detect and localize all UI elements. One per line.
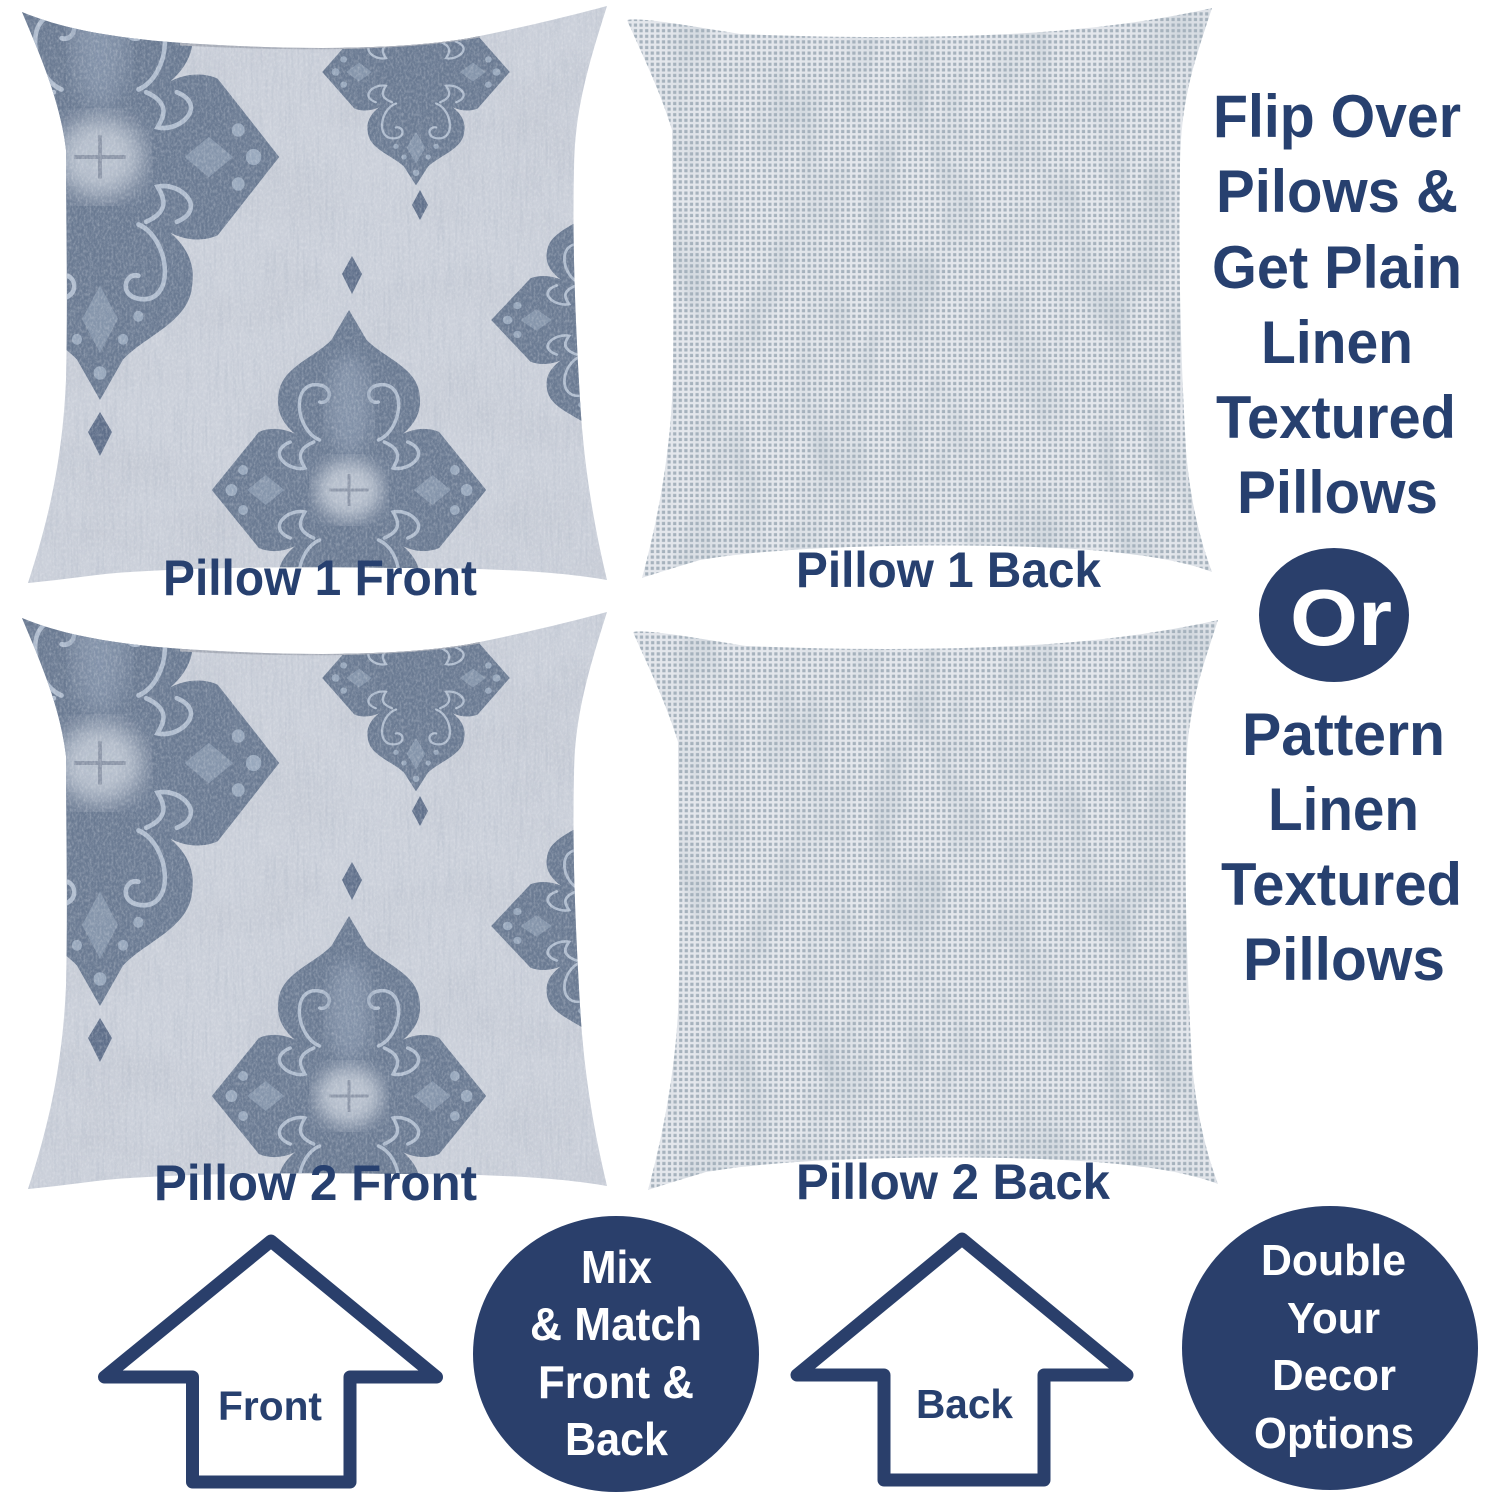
badge: mix and match: & Match [530, 1298, 702, 1350]
badge: or [1259, 548, 1409, 682]
pillow 1 back [620, 0, 1220, 590]
badge: double your decor options: Options [1254, 1409, 1414, 1458]
text block: pattern: Pattern [1242, 701, 1445, 768]
label: pillow 2 front: Pillow 2 Front [154, 1155, 477, 1211]
pillow 1 front [0, 0, 721, 670]
arrow: front [104, 1241, 436, 1482]
arrow: front: Front [218, 1383, 322, 1429]
arrow: back: Back [916, 1381, 1013, 1427]
text block: pattern: Linen [1268, 776, 1419, 843]
label: pillow 1 back: Pillow 1 Back [796, 542, 1101, 598]
badge: double your decor options: Your [1287, 1294, 1380, 1343]
pillow 2 back [626, 612, 1226, 1202]
badge: double your decor options: Double [1261, 1236, 1406, 1285]
text block: flip over: Linen [1261, 309, 1413, 376]
badge: or: Or [1290, 573, 1392, 662]
text block: pattern: Pillows [1243, 926, 1445, 993]
text block: flip over: Pillows [1237, 459, 1438, 526]
text block: pattern [1221, 701, 1462, 993]
text block: pattern: Textured [1221, 851, 1462, 918]
badge: mix and match [473, 1216, 759, 1492]
arrow: back [797, 1239, 1127, 1480]
badge: double your decor options [1182, 1206, 1478, 1490]
badge: mix and match: Back [565, 1413, 668, 1465]
text block: flip over [1212, 83, 1462, 526]
badge: double your decor options: Decor [1272, 1351, 1396, 1400]
badge: mix and match: Front & [538, 1356, 694, 1408]
label: pillow 1 front: Pillow 1 Front [163, 550, 477, 606]
text block: flip over: Flip Over [1213, 83, 1461, 150]
text block: flip over: Get Plain [1212, 234, 1462, 301]
badge: mix and match: Mix [581, 1241, 652, 1293]
text block: flip over: Pilows & [1216, 158, 1458, 225]
text block: flip over: Textured [1216, 384, 1456, 451]
label: pillow 2 back: Pillow 2 Back [796, 1154, 1110, 1210]
pillow 2 front [0, 520, 721, 1276]
